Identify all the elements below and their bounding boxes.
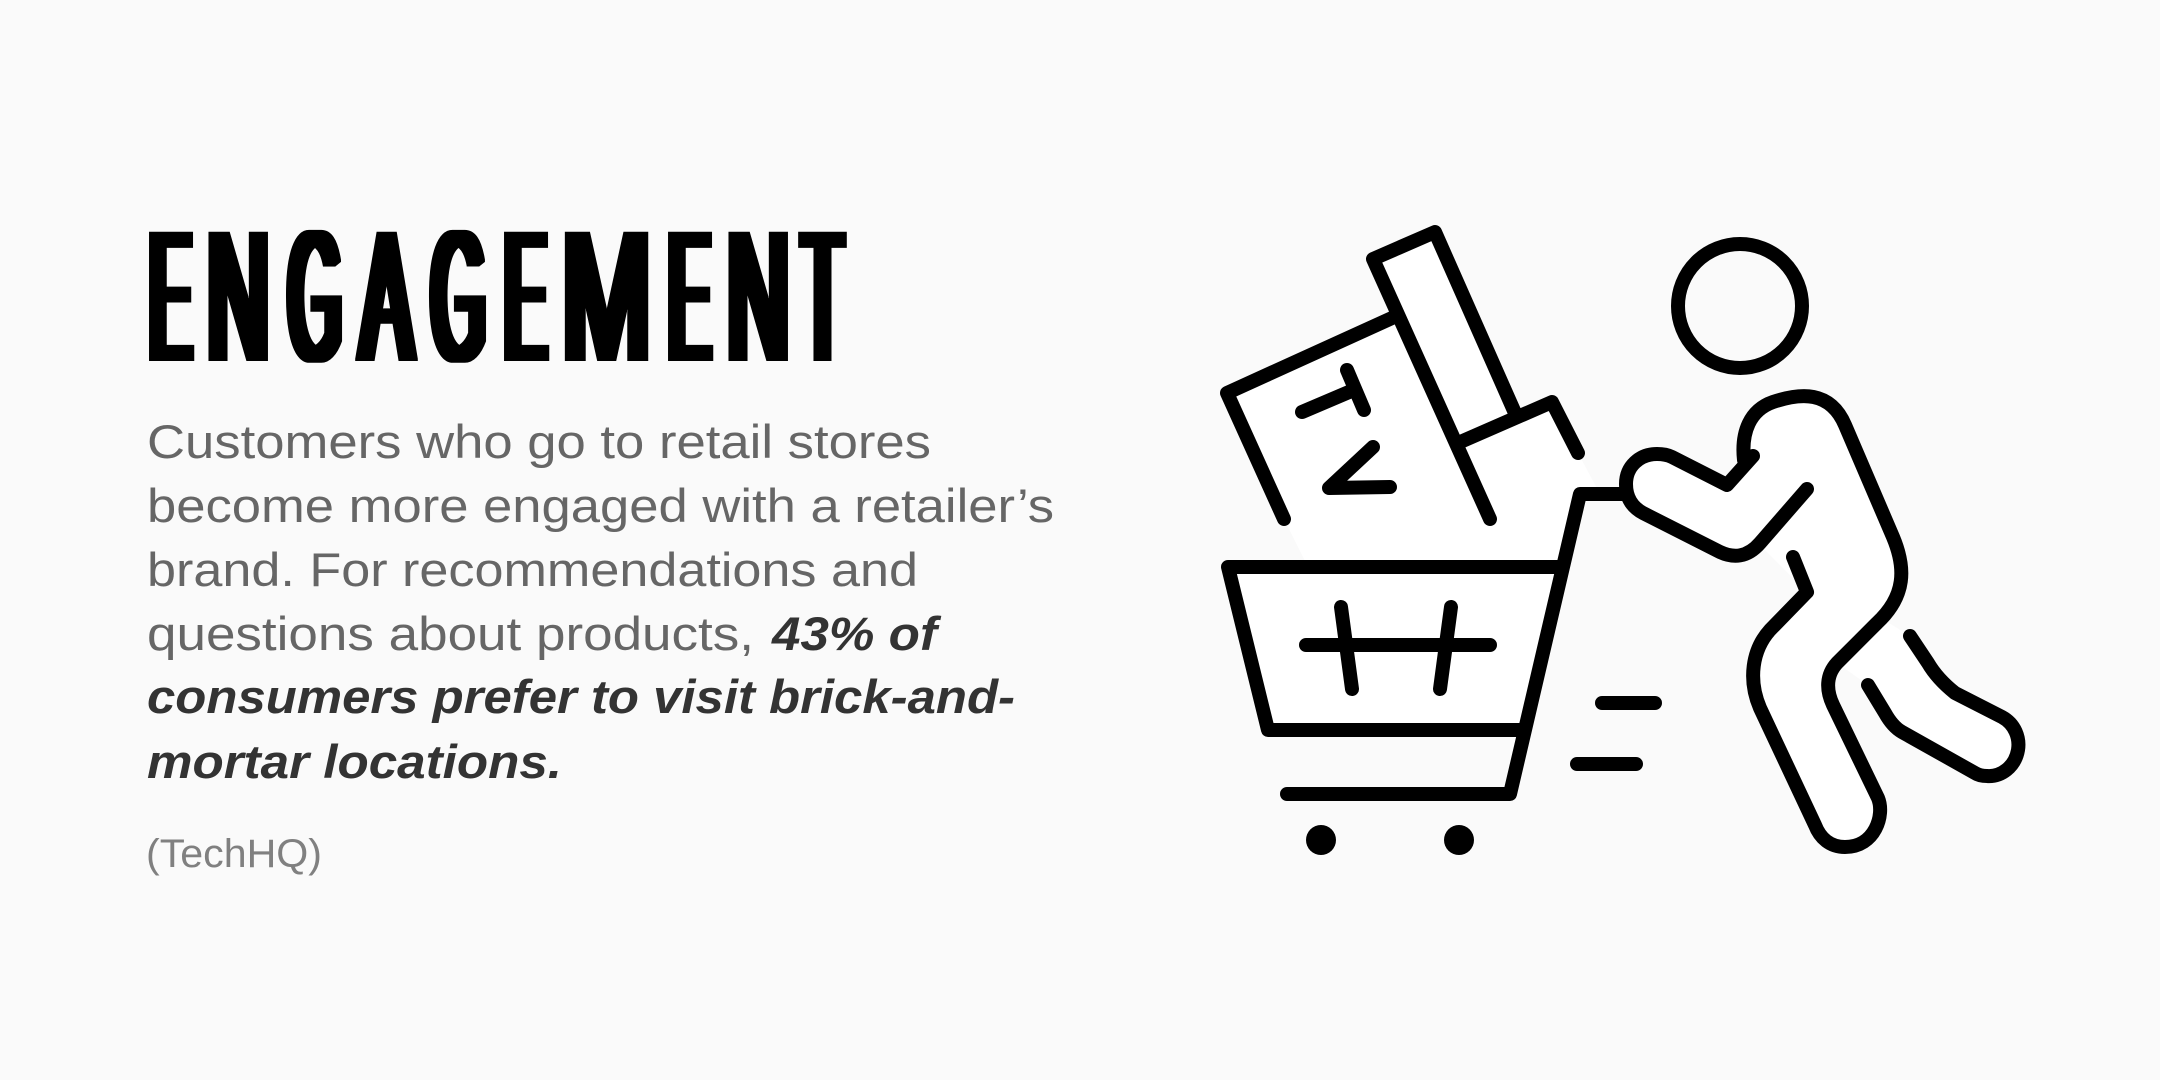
title: E: [150, 194, 191, 400]
icon: cart basket: [1228, 567, 1562, 730]
body text: Customers who go to retail stores: [147, 415, 931, 468]
icon: tall box: [1373, 232, 1515, 519]
source citation: (TechHQ): [146, 832, 322, 876]
icon: letter V: [1329, 447, 1390, 488]
icon: TV box: [1227, 318, 1392, 519]
body text: [147, 415, 1054, 788]
infographic canvas: T: [803, 194, 842, 400]
title: A: [361, 194, 412, 400]
icon: arm: [1626, 454, 1807, 556]
icon: letter T: [1302, 370, 1364, 412]
body text: 43% of: [771, 607, 942, 660]
icon: torso and front leg: [1743, 396, 1901, 847]
body text: become more engaged with a retailer’s: [147, 479, 1054, 532]
icon: box side: [1458, 402, 1578, 453]
title: E: [669, 194, 710, 400]
icon: speed lines: [1577, 703, 1655, 764]
body text: questions about products,: [147, 607, 754, 660]
body text: brand. For recommendations and: [147, 543, 918, 596]
icon: cart handle and frame: [1287, 494, 1622, 794]
icon: head: [1678, 244, 1802, 368]
body text: mortar locations.: [147, 735, 562, 788]
title: E: [505, 194, 546, 400]
icon: cart wheels: [1306, 825, 1474, 855]
icon: shopper pushing cart: [1227, 232, 2018, 855]
icon: white fill for packages and cart: [1227, 232, 1600, 794]
title: M: [562, 194, 651, 400]
title: N: [208, 194, 269, 400]
icon: cart grid: [1306, 607, 1490, 689]
title: G: [289, 194, 341, 400]
icon: back leg: [1868, 636, 2018, 776]
body text: consumers prefer to visit brick-and-: [147, 670, 1015, 723]
title: G: [432, 194, 485, 400]
title: N: [728, 194, 789, 400]
icon: white fill for figure: [1626, 396, 2018, 847]
